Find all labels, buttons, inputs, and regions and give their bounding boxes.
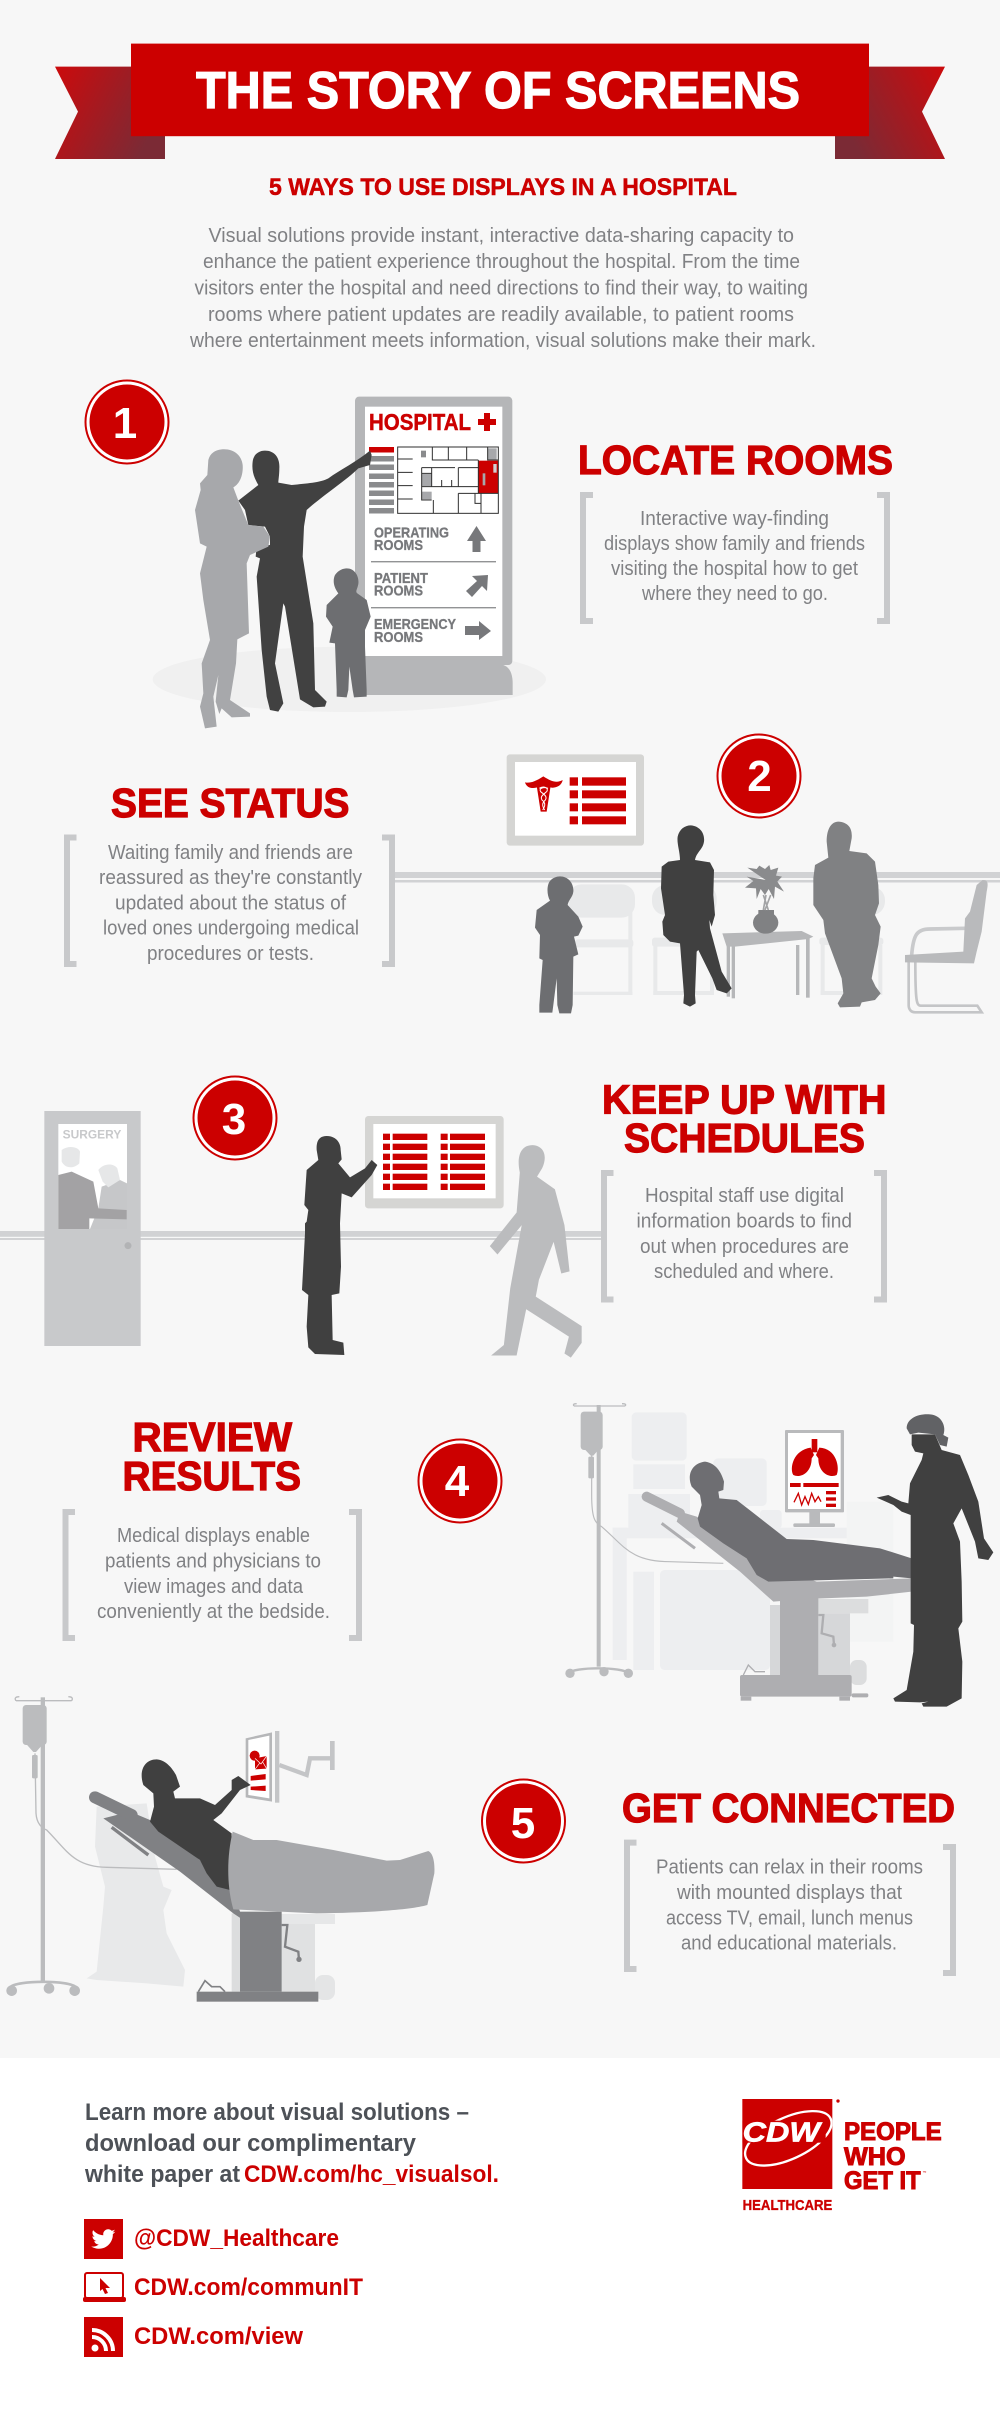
description with brackets bbox=[66, 1512, 359, 1638]
description with brackets bbox=[627, 1843, 953, 1973]
kiosk floor plan bbox=[398, 447, 498, 513]
description with brackets bbox=[604, 1173, 884, 1300]
description with brackets: with mounted displays that bbox=[676, 1882, 902, 1904]
panel: keep up with schedules bbox=[0, 1076, 886, 1358]
seated man bbox=[813, 822, 881, 1007]
seated woman bbox=[661, 825, 732, 1007]
figures: man, woman and child bbox=[195, 449, 372, 728]
physician bbox=[877, 1414, 993, 1707]
description with brackets bbox=[67, 838, 392, 965]
intro paragraph: rooms where patient updates are readily available, to patient rooms bbox=[208, 304, 794, 326]
number badge 1: 1 bbox=[113, 399, 137, 448]
heading: SCHEDULES bbox=[624, 1115, 865, 1161]
description with brackets: loved ones undergoing medical bbox=[103, 918, 359, 940]
description with brackets: where they need to go. bbox=[641, 583, 828, 605]
description with brackets: out when procedures are bbox=[640, 1236, 849, 1258]
panel: footer bbox=[83, 2099, 942, 2357]
IV stand bbox=[565, 1404, 723, 1678]
intro paragraph: visitors enter the hospital and need directions to find their way, to waiting bbox=[194, 278, 808, 300]
description with brackets: updated about the status of bbox=[115, 892, 346, 914]
number badge 2 bbox=[718, 734, 800, 818]
kiosk screen content: HOSPITAL bbox=[369, 409, 471, 435]
wall display schedule board bbox=[365, 1116, 504, 1208]
table bbox=[722, 931, 813, 998]
number badge 1 bbox=[86, 380, 168, 464]
tagline: GET IT bbox=[844, 2168, 921, 2195]
bed bbox=[95, 1797, 335, 2002]
chairs bbox=[568, 884, 885, 995]
description with brackets: view images and data bbox=[124, 1576, 304, 1598]
intro paragraph bbox=[189, 225, 816, 352]
CDW logo: CDW bbox=[743, 2117, 823, 2148]
heading: SEE STATUS bbox=[111, 780, 350, 826]
title: THE STORY OF SCREENS bbox=[196, 62, 800, 120]
IV stand bbox=[6, 1697, 177, 1996]
mounted display bbox=[246, 1731, 335, 1803]
background machine bbox=[87, 1803, 185, 1987]
intro paragraph: where entertainment meets information, visual solutions make their mark. bbox=[189, 330, 816, 352]
kiosk directions: OPERATING bbox=[374, 526, 449, 542]
heading bbox=[122, 1414, 301, 1499]
kiosk directions: PATIENT bbox=[374, 571, 428, 587]
tagline bbox=[844, 2119, 942, 2195]
intro paragraph: Visual solutions provide instant, interactive data-sharing capacity to bbox=[208, 225, 794, 247]
kiosk directions: ROOMS bbox=[374, 584, 423, 600]
tagline: ™ bbox=[923, 2170, 927, 2175]
illustration: surgery door bbox=[44, 1111, 141, 1346]
description with brackets bbox=[583, 495, 887, 621]
heading bbox=[602, 1076, 886, 1161]
number badge 5 bbox=[482, 1780, 565, 1862]
call to action: CDW.com/hc_visualsol. bbox=[244, 2161, 499, 2188]
description with brackets: Hospital staff use digital bbox=[645, 1185, 844, 1207]
kiosk directions: ROOMS bbox=[374, 538, 423, 554]
blanket bbox=[228, 1832, 434, 1913]
description with brackets: conveniently at the bedside. bbox=[97, 1601, 330, 1623]
call to action: Learn more about visual solutions – bbox=[85, 2099, 469, 2126]
child bbox=[535, 876, 583, 1013]
description with brackets: Patients can relax in their rooms bbox=[656, 1856, 923, 1878]
call to action: download our complimentary bbox=[85, 2130, 417, 2157]
patient bed bbox=[647, 1497, 912, 1701]
wall display with caduceus bbox=[507, 754, 644, 846]
panel: locate rooms bbox=[86, 380, 893, 728]
panel: see status bbox=[67, 734, 1000, 1013]
icon: twitter bbox=[84, 2219, 123, 2259]
panel: get connected bbox=[6, 1697, 955, 2002]
illustration: surgery door: SURGERY bbox=[63, 1127, 121, 1141]
patient bbox=[690, 1462, 912, 1582]
background equipment bbox=[613, 1412, 893, 1670]
figure: walking person bbox=[490, 1145, 582, 1358]
tagline: PEOPLE bbox=[844, 2119, 942, 2146]
description with brackets: Waiting family and friends are bbox=[108, 842, 353, 864]
heading: REVIEW bbox=[132, 1414, 292, 1460]
description with brackets: Interactive way-finding bbox=[640, 508, 829, 530]
number badge 5: 5 bbox=[511, 1799, 535, 1848]
description with brackets: information boards to find bbox=[636, 1210, 852, 1232]
tagline: WHO bbox=[844, 2144, 906, 2171]
heading: LOCATE ROOMS bbox=[578, 437, 893, 483]
description with brackets: reassured as they're constantly bbox=[99, 867, 362, 889]
illustration: physician and patient at bedside bbox=[565, 1404, 993, 1707]
illustration: waiting room bbox=[535, 822, 988, 1013]
number badge 4 bbox=[418, 1440, 502, 1522]
number badge 3 bbox=[194, 1076, 276, 1160]
intro paragraph: enhance the patient experience throughout the hospital. From the time bbox=[203, 251, 800, 273]
heading: RESULTS bbox=[122, 1453, 301, 1499]
kiosk directions: ROOMS bbox=[374, 630, 423, 646]
kiosk menu bbox=[369, 447, 394, 514]
illustration: patient with mounted display bbox=[6, 1697, 434, 2002]
kiosk directions: EMERGENCY bbox=[374, 617, 456, 633]
figure: doctor bbox=[302, 1136, 377, 1355]
number badge 3: 3 bbox=[222, 1095, 246, 1144]
description with brackets: access TV, email, lunch menus bbox=[666, 1908, 913, 1930]
description with brackets: visiting the hospital how to get bbox=[611, 558, 858, 580]
number badge 2: 2 bbox=[747, 752, 772, 801]
medical display with lungs bbox=[785, 1430, 844, 1527]
potted plant bbox=[745, 865, 784, 934]
icon: laptop cursor bbox=[83, 2273, 126, 2302]
panel: review results bbox=[66, 1404, 993, 1707]
description with brackets: and educational materials. bbox=[681, 1932, 897, 1954]
description with brackets: Medical displays enable bbox=[117, 1525, 310, 1547]
heading: GET CONNECTED bbox=[622, 1785, 955, 1831]
icon: rss bbox=[84, 2317, 123, 2357]
patient bbox=[142, 1759, 251, 1890]
subtitle: 5 WAYS TO USE DISPLAYS IN A HOSPITAL bbox=[269, 174, 737, 201]
call to action: white paper at bbox=[84, 2161, 240, 2188]
number badge 4: 4 bbox=[445, 1457, 470, 1506]
kiosk directions bbox=[371, 526, 496, 646]
illustration: family at wayfinding kiosk bbox=[153, 397, 546, 712]
heading: KEEP UP WITH bbox=[602, 1076, 886, 1122]
armchair bbox=[905, 880, 988, 1012]
description with brackets: patients and physicians to bbox=[105, 1550, 321, 1572]
description with brackets: displays show family and friends bbox=[604, 533, 865, 555]
community link: CDW.com/communIT bbox=[134, 2274, 363, 2301]
description with brackets: procedures or tests. bbox=[147, 943, 314, 965]
call to action bbox=[84, 2099, 499, 2188]
CDW logo bbox=[737, 2099, 942, 2214]
view link: CDW.com/view bbox=[134, 2323, 303, 2350]
healthcare label: HEALTHCARE bbox=[743, 2198, 833, 2214]
description with brackets: scheduled and where. bbox=[654, 1261, 834, 1283]
title banner bbox=[55, 44, 945, 159]
twitter handle: @CDW_Healthcare bbox=[134, 2225, 339, 2252]
